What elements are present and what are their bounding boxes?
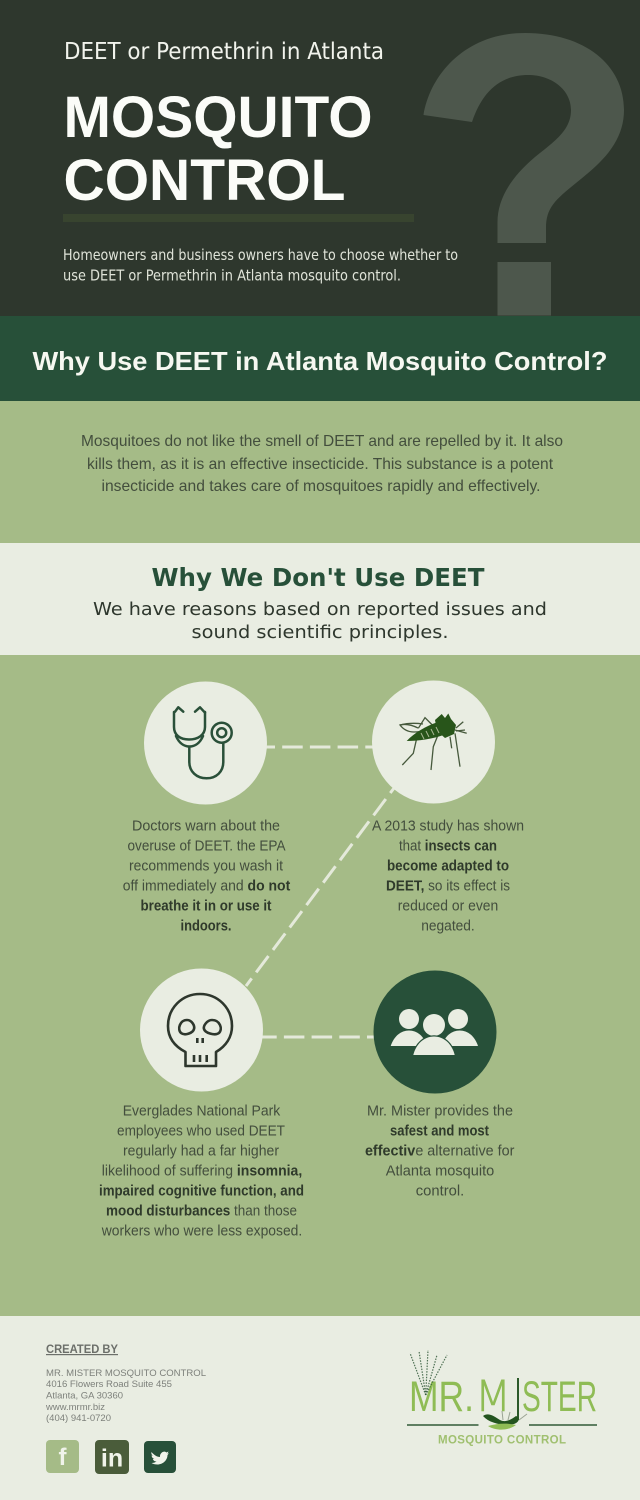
panel: why use DEET description: insecticide and takes care of mosquitoes rapidly and effectively. (102, 478, 540, 495)
contact details (45, 1368, 206, 1424)
panel: why use DEET description: kills them, as it is an effective insecticide. This substance is a potent (87, 456, 554, 473)
icon: linkedin (95, 1440, 129, 1474)
contact details: (404) 941-0720 (46, 1413, 111, 1424)
text: 2013 study: DEET, so its effect is (386, 878, 510, 894)
title (64, 85, 372, 213)
text: Everglades employees: employees who used DEET (117, 1124, 285, 1140)
panel: why use DEET heading band: Why Use DEET in Atlanta Mosquito Control? (32, 346, 608, 376)
icon: stethoscope (144, 682, 267, 804)
text: Mr. Mister alternative: Mr. Mister provides the (367, 1104, 513, 1120)
text: 2013 study: negated. (421, 918, 475, 934)
header description (63, 246, 458, 284)
logo spray (410, 1350, 447, 1395)
text: doctors warning: breathe it in or use it (140, 898, 272, 914)
text: Mr. Mister alternative (365, 1104, 515, 1200)
text: doctors warning: indoors. (180, 918, 232, 934)
panel: why we don't use DEET (0, 543, 640, 655)
logo: Mr. Mister Mosquito Control (407, 1350, 597, 1446)
text: Mr. Mister alternative: safest and most (390, 1124, 489, 1140)
logo wordmark: M (475, 1372, 511, 1422)
logo: Mr. Mister Mosquito Control: MOSQUITO CONTROL (438, 1434, 566, 1446)
icon: facebook (46, 1440, 79, 1473)
panel: why use DEET description (0, 401, 640, 543)
logo wordmark (409, 1372, 597, 1422)
panel: why we don't use DEET: sound scientific principles. (192, 622, 448, 643)
icon: skull (140, 968, 263, 1092)
icon: twitter (144, 1441, 176, 1473)
header description: Homeowners and business owners have to choose whether to (63, 246, 458, 264)
logo wordmark: STER (522, 1373, 597, 1421)
text: 2013 study: become adapted to (387, 858, 509, 874)
icon: large question mark (424, 33, 624, 316)
icon: facebook: f (58, 1444, 68, 1471)
created by heading: CREATED BY (46, 1342, 118, 1356)
text: doctors warning (123, 818, 290, 934)
text: doctors warning: Doctors warn about the (132, 818, 280, 834)
text: Everglades employees: impaired cognitive function, and (99, 1184, 304, 1200)
text: doctors warning: overuse of DEET. the EPA (128, 838, 286, 854)
logo wordmark: MR. (409, 1373, 474, 1421)
text: doctors warning: off immediately and do not (123, 878, 290, 894)
text: 2013 study: reduced or even (398, 898, 498, 914)
text: Everglades employees: regularly had a far higher (123, 1144, 279, 1160)
text: Everglades employees: likelihood of suffering insomnia, (102, 1164, 302, 1180)
icon: linkedin: in (101, 1444, 123, 1472)
panel: reasons (0, 655, 640, 1316)
icon: group of people (374, 970, 496, 1094)
dashed connectors (246, 747, 400, 1037)
text: Mr. Mister alternative: effective alternative for (365, 1144, 515, 1160)
contact details: MR. MISTER MOSQUITO CONTROL (46, 1368, 206, 1379)
panel: header (0, 0, 640, 316)
text: 2013 study: A 2013 study has shown (372, 818, 524, 834)
title: MOSQUITO (64, 85, 372, 150)
text: Everglades employees: Everglades National Park (123, 1104, 281, 1120)
text: Mr. Mister alternative: Atlanta mosquito (386, 1164, 494, 1180)
text: Everglades employees: workers who were less exposed. (101, 1224, 302, 1240)
contact details: www.mrmr.biz (45, 1402, 105, 1413)
panel: footer (0, 1316, 640, 1500)
contact details: 4016 Flowers Road Suite 455 (46, 1379, 172, 1390)
subtitle: DEET or Permethrin in Atlanta (64, 39, 384, 65)
panel: why we don't use DEET: Why We Don't Use DEET (152, 563, 484, 592)
text: doctors warning: recommends you wash it (129, 858, 283, 874)
title: CONTROL (64, 148, 346, 213)
text: Everglades employees: mood disturbances than those (106, 1204, 297, 1220)
panel: why use DEET description: Mosquitoes do not like the smell of DEET and are repelled by it. It also (81, 433, 563, 450)
header description: use DEET or Permethrin in Atlanta mosquito control. (63, 266, 401, 284)
logo mosquito (483, 1411, 527, 1430)
text: Mr. Mister alternative: control. (416, 1184, 464, 1200)
text: 2013 study (372, 818, 524, 934)
text: 2013 study: that insects can (399, 838, 497, 854)
contact details: Atlanta, GA 30360 (46, 1390, 123, 1402)
icon: mosquito (372, 680, 495, 804)
text: Everglades employees (99, 1104, 304, 1240)
panel: why we don't use DEET: We have reasons based on reported issues and (93, 599, 547, 620)
panel: why use DEET heading band (0, 316, 640, 401)
